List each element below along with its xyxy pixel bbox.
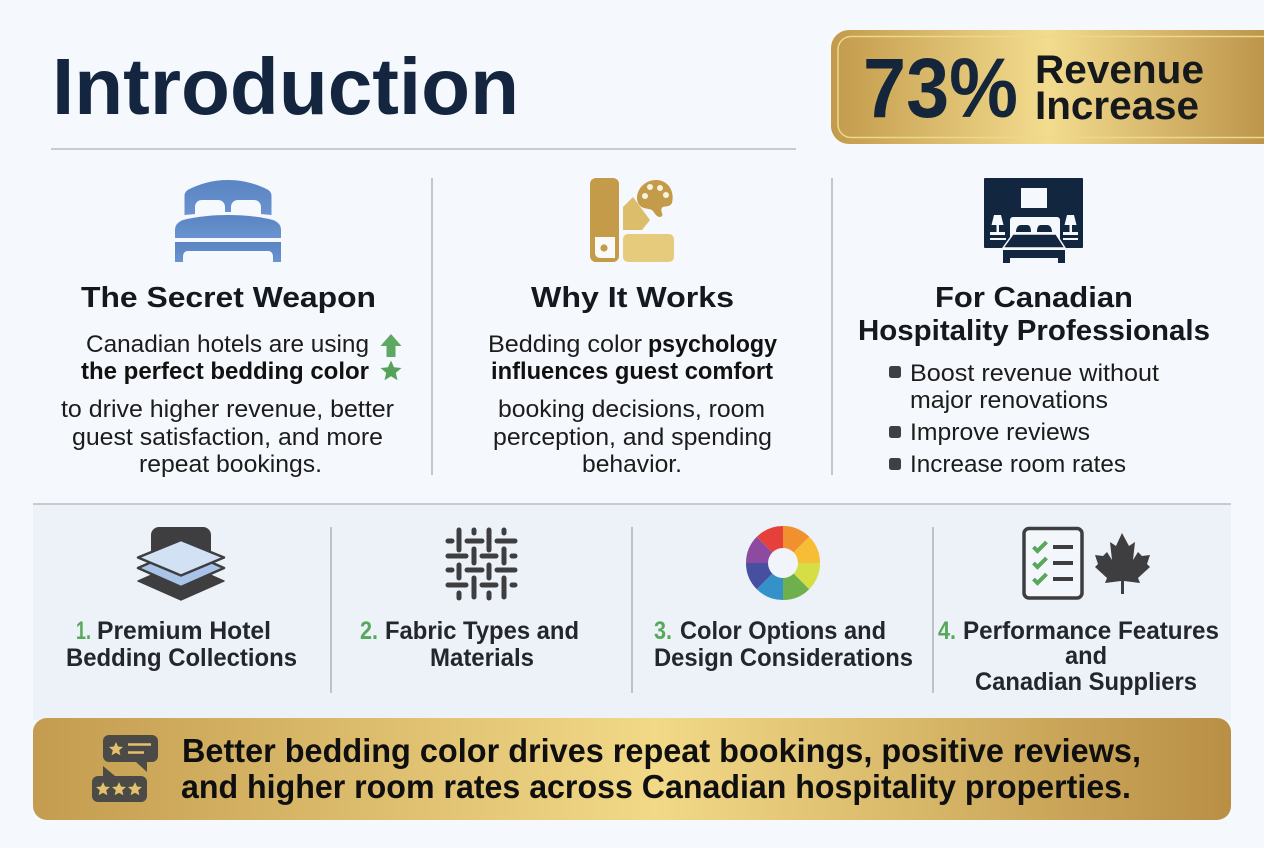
icon: bedding layers [138, 527, 224, 600]
icon: maple leaf [1095, 533, 1150, 594]
title: Introduction [52, 42, 519, 131]
icon: checklist [1024, 528, 1082, 598]
icon: green star [380, 360, 402, 380]
callout: bottom banner [33, 718, 1231, 820]
label: Design Considerations [654, 644, 913, 672]
text block: booking decisions, room [498, 396, 765, 423]
badge label [1035, 48, 1204, 128]
bullet list: major renovations [910, 387, 1108, 414]
bullet list: Boost revenue without [910, 360, 1159, 387]
badge label: Revenue [1035, 48, 1204, 92]
text block: Bedding color [488, 331, 642, 358]
bullet list: Improve reviews [910, 419, 1090, 446]
label: and [1065, 642, 1107, 670]
topic 4: performance and suppliers [938, 528, 1219, 696]
text block: perception, and spending [493, 424, 772, 451]
panel: for canadian hospitality professionals [858, 178, 1210, 478]
text block: Canadian hotels are using [86, 331, 369, 358]
bullet list: Increase room rates [910, 451, 1126, 478]
icon: green arrow [380, 334, 402, 357]
icon: bed [175, 180, 281, 262]
icon: colour wheel [746, 526, 820, 600]
icon: woven fabric [448, 530, 515, 598]
icon: review bubbles [92, 735, 158, 802]
label: Canadian Suppliers [975, 668, 1197, 696]
bullet list [889, 360, 1159, 478]
text block: psychology [648, 331, 778, 358]
badge label: Increase [1035, 84, 1199, 128]
panel: why it works [488, 178, 778, 478]
topic 3: colour options [654, 526, 913, 672]
label: Premium Hotel [97, 617, 271, 645]
text block: to drive higher revenue, better [61, 396, 394, 423]
label: Color Options and [680, 617, 886, 645]
label [654, 617, 913, 672]
heading: Why It Works [531, 282, 734, 314]
icon: hotel room [984, 178, 1083, 263]
banner text: Better bedding color drives repeat bookings, positive reviews, [182, 732, 1141, 769]
text block: behavior. [582, 451, 682, 478]
banner text [181, 732, 1141, 805]
text block [488, 331, 778, 478]
heading [858, 282, 1210, 347]
topic 1: premium hotel bedding [66, 527, 297, 672]
label [360, 617, 579, 672]
heading: Hospitality Professionals [858, 315, 1210, 347]
text block: influences guest comfort [491, 358, 773, 385]
text block: the perfect bedding color [81, 358, 369, 385]
text block: repeat bookings. [139, 451, 322, 478]
label: Materials [430, 644, 534, 672]
label [938, 617, 1219, 696]
banner text: and higher room rates across Canadian hospitality properties. [181, 768, 1131, 805]
text block [61, 331, 394, 478]
label: Fabric Types and [385, 617, 579, 645]
label [66, 617, 297, 672]
panel: the secret weapon [61, 180, 402, 478]
stat: 73%: 73% [863, 41, 1018, 135]
label: 4. [938, 617, 956, 645]
callout: revenue badge [831, 30, 1264, 144]
label: Bedding Collections [66, 644, 297, 672]
heading: The Secret Weapon [81, 282, 376, 314]
label: 3. [654, 617, 672, 645]
heading: For Canadian [935, 282, 1133, 314]
label: Performance Features [963, 617, 1219, 645]
icon: colour swatches and palette [590, 178, 674, 262]
topic 2: fabric types [360, 530, 579, 672]
panel: numbered topics [33, 504, 1231, 720]
label: 2. [360, 617, 378, 645]
label: 1. [76, 617, 91, 645]
text block: guest satisfaction, and more [72, 424, 383, 451]
